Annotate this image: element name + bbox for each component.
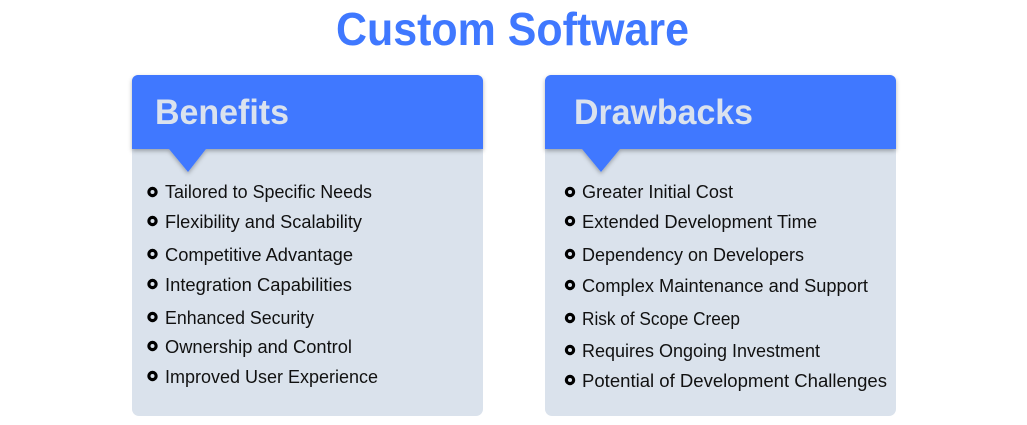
benefits list (149, 181, 378, 387)
benefits panel background (132, 75, 483, 416)
title: Custom Software (336, 3, 689, 55)
benefits list: Enhanced Security (165, 307, 315, 328)
drawbacks list: Requires Ongoing Investment (582, 340, 820, 361)
benefits list: Integration Capabilities (165, 274, 352, 295)
drawbacks header banner (545, 75, 896, 172)
benefits list: Tailored to Specific Needs (165, 181, 372, 202)
drawbacks list: Complex Maintenance and Support (582, 275, 868, 296)
drawbacks panel background (545, 75, 896, 416)
benefits heading: Benefits (155, 93, 289, 132)
drawbacks list (566, 181, 887, 391)
benefits list: Flexibility and Scalability (165, 211, 363, 232)
panel: benefits (132, 75, 483, 416)
drawbacks heading: Drawbacks (574, 93, 753, 132)
benefits list: Improved User Experience (165, 366, 378, 387)
benefits list: Ownership and Control (165, 336, 352, 357)
drawbacks list: Greater Initial Cost (582, 181, 733, 202)
benefits header banner (132, 75, 483, 172)
drawbacks list: Potential of Development Challenges (582, 370, 887, 391)
drawbacks list: Dependency on Developers (582, 244, 804, 265)
panel: drawbacks (545, 75, 896, 416)
drawbacks list: Risk of Scope Creep (582, 308, 740, 329)
drawbacks list: Extended Development Time (582, 211, 817, 232)
benefits list: Competitive Advantage (165, 244, 353, 265)
